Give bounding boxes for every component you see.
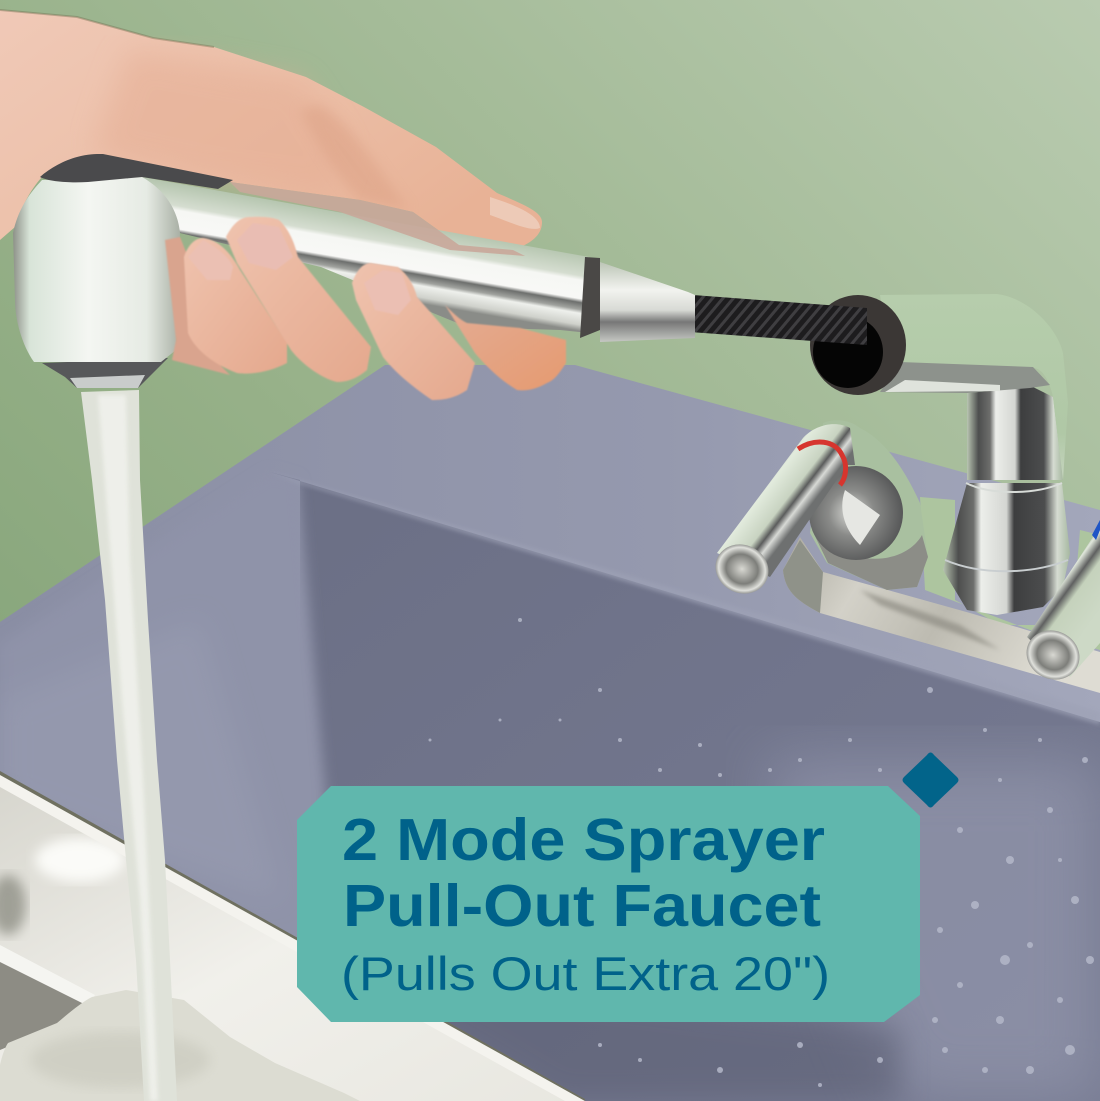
faucet base, dome and handles — [707, 294, 1100, 693]
left handle — [717, 424, 855, 577]
faucet body — [943, 483, 1070, 615]
heading: Pull-Out Faucet — [343, 873, 821, 939]
dome — [810, 420, 928, 590]
deck plate — [783, 537, 1100, 693]
collar — [600, 262, 695, 342]
tray rim — [0, 773, 585, 1101]
heading: 2 Mode Sprayer — [342, 807, 825, 873]
sprayer tube — [142, 177, 589, 333]
heading: (Pulls Out Extra 20") — [341, 947, 830, 1000]
fingernails — [188, 240, 233, 280]
right handle — [1027, 530, 1100, 677]
heading — [341, 807, 830, 1000]
water droplets — [428, 618, 1094, 1087]
hand back and thumb — [0, 10, 542, 251]
spout arm — [880, 294, 1068, 480]
pull-out sprayer — [13, 154, 695, 388]
spout stem — [967, 387, 1063, 480]
collar ring — [580, 257, 600, 338]
water stream — [81, 390, 177, 1101]
hose mount ring and braided hose — [690, 295, 906, 395]
hand fingers — [165, 217, 566, 400]
sprayer nozzle — [42, 358, 168, 388]
diamond accent — [902, 752, 958, 808]
sprayer head — [13, 177, 180, 362]
utility sink — [0, 365, 1100, 1101]
rubber cap — [40, 154, 233, 189]
callout label — [297, 786, 920, 1022]
water splash — [0, 990, 360, 1101]
stainless tray at sink front — [0, 771, 585, 1101]
